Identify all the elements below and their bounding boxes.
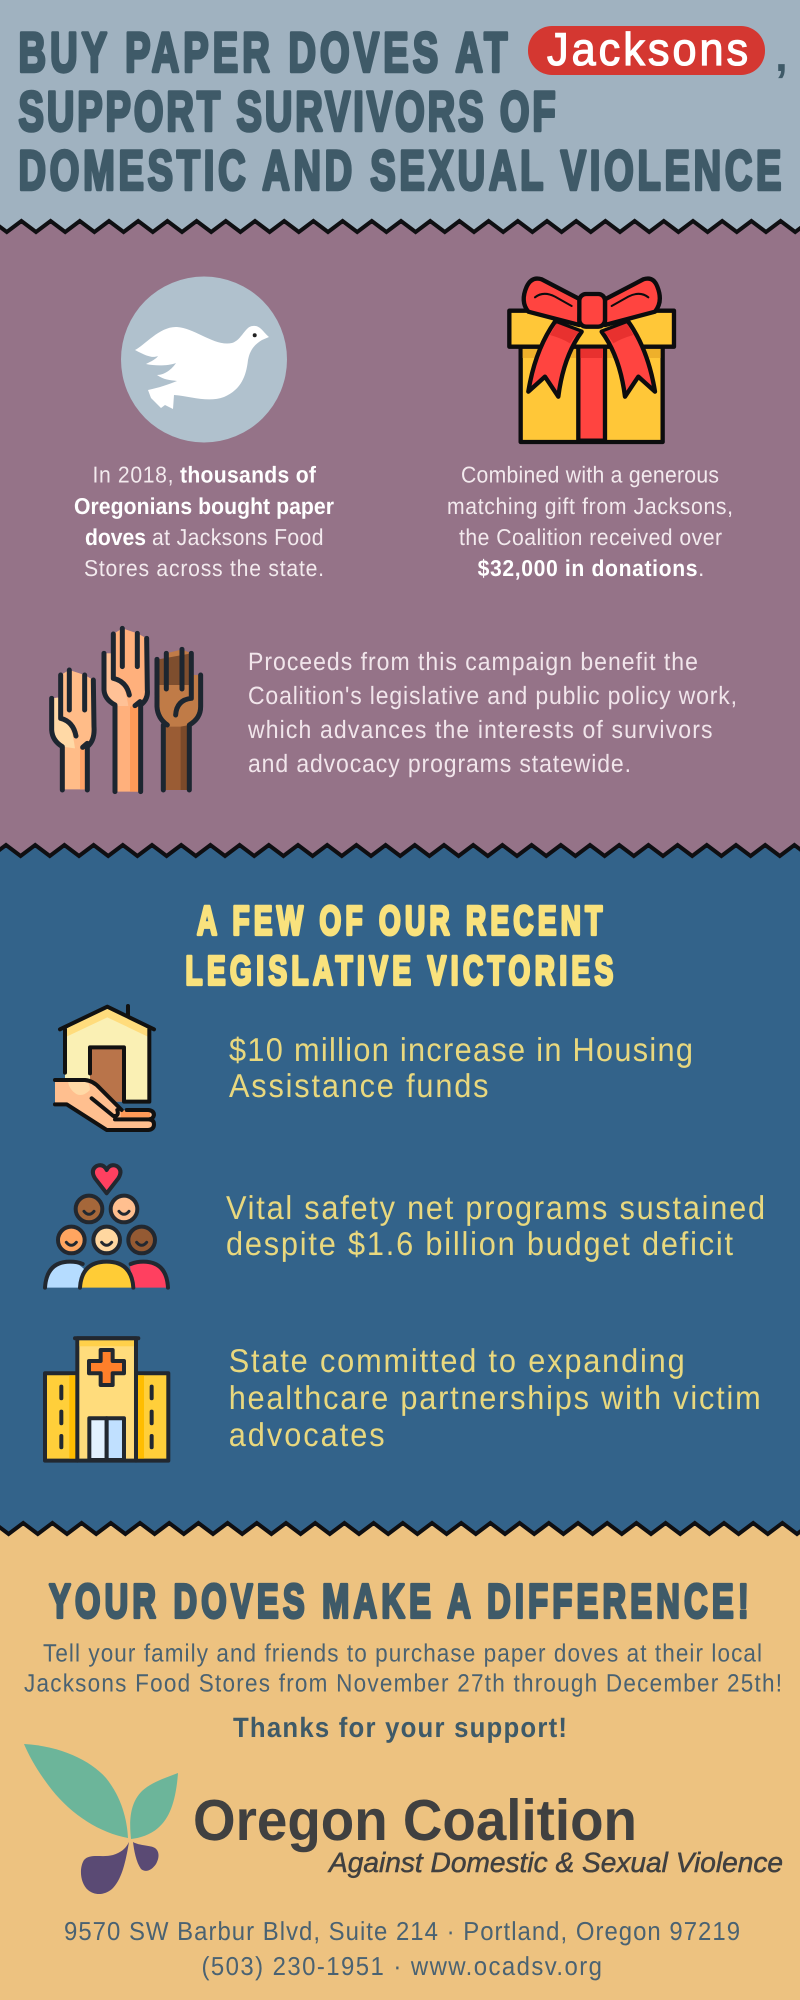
text: matching gift: . [698,555,704,581]
text: healthcare partnerships [229,1342,761,1453]
icon: gift box [509,279,674,442]
middle hand [104,628,147,792]
text: housing assistance [229,1031,693,1104]
panel: blue victories background [0,840,800,1534]
text: safety net [226,1189,765,1262]
heading: legislative victories: LEGISLATIVE VICTORIES [186,948,613,994]
icon: leaves and drops [24,1744,178,1894]
text: proceeds paragraph [247,648,737,778]
text: safety net: despite $1.6 billion budget deficit [226,1225,733,1262]
text: thanks: Thanks for your support! [233,1712,567,1743]
text: housing assistance: $10 million increase in Housing [229,1031,693,1068]
title: DOMESTIC AND SEXUAL VIOLENCE [18,138,781,202]
text: thousands of Oregonians: Oregonians bought paper [74,493,334,519]
text: proceeds paragraph: Coalition's legislative and public policy work, [248,682,737,710]
icon: people and heart [45,1165,168,1288]
text: housing assistance: Assistance funds [229,1067,488,1104]
text: healthcare partnerships: advocates [229,1416,385,1453]
title [18,20,788,202]
title: , [775,29,788,81]
text: thousands of Oregonians: Stores across the state. [84,555,324,581]
icon: raised hands [52,628,201,792]
text: matching gift: the Coalition received over [459,524,722,550]
right hand [157,649,201,790]
icon: dove in circle [121,276,287,442]
heading: your doves make a difference: YOUR DOVES MAKE A DIFFERENCE! [49,1576,749,1628]
text: proceeds paragraph: which advances the interests of survivors [247,716,713,744]
text: thousands of Oregonians: doves [85,524,146,550]
logo: Oregon Coalition: Against Domestic & Sexual Violence [327,1847,783,1878]
text: thousands of Oregonians [74,462,334,581]
text: thousands of Oregonians: thousands of [180,462,316,488]
text: tell your family: Jacksons Food Stores from November 27th through December 25th! [24,1670,782,1698]
text: matching gift: matching gift from Jacksons, [447,493,733,519]
title: BUY PAPER DOVES AT [18,20,507,84]
heading: legislative victories: A FEW OF OUR RECENT [197,898,602,944]
text: thousands of Oregonians: In 2018, [92,462,173,488]
text: proceeds paragraph: and advocacy programs statewide. [248,750,631,778]
icon: hospital [45,1338,168,1461]
text: address and contact [64,1916,740,1981]
logo: Jacksons: Jacksons [547,23,748,75]
text: healthcare partnerships: healthcare partnerships with victim [229,1379,761,1416]
text: matching gift: $32,000 in donations [478,555,698,581]
left hand [52,670,94,790]
logo: Oregon Coalition: Oregon Coalition [193,1788,637,1853]
icon: house on hand [55,1006,154,1130]
panel: purple campaign background [0,200,800,856]
text: tell your family: Tell your family and friends to purchase paper doves at their local [43,1640,762,1668]
text: thousands of Oregonians: at Jacksons Food [152,524,323,550]
text: proceeds paragraph: Proceeds from this campaign benefit the [248,648,698,676]
heading: legislative victories [186,898,613,994]
panel: tan footer background [0,1520,800,2000]
text: matching gift: Combined with a generous [461,462,719,488]
text: healthcare partnerships: State committed to expanding [229,1342,685,1379]
text: safety net: Vital safety net programs sustained [226,1189,765,1226]
text: matching gift [447,462,733,581]
text: address and contact: (503) 230-1951 · www.ocadsv.org [202,1951,602,1981]
text: tell your family [24,1640,782,1698]
panel: grey header background [0,0,800,232]
title: SUPPORT SURVIVORS OF [18,80,556,142]
text: address and contact: 9570 SW Barbur Blvd, Suite 214 · Portland, Oregon 97219 [64,1916,740,1946]
logo: Oregon Coalition [24,1744,783,1894]
